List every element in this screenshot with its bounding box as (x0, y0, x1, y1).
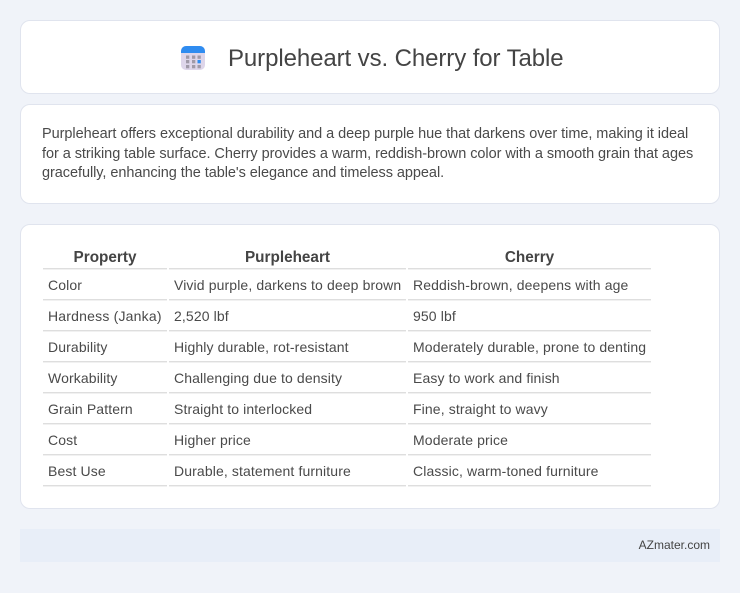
comparison table: Vivid purple, darkens to deep brown (174, 277, 401, 293)
row: Hardness: Hardness (Janka) (48, 308, 162, 324)
comparison table: Challenging due to density (174, 370, 342, 386)
icon: calendar (181, 46, 205, 70)
comparison table: Straight to interlocked (174, 401, 312, 417)
comparison table: 2,520 lbf (174, 308, 229, 324)
comparison table: Easy to work and finish (413, 370, 560, 386)
row: Best Use: Best Use (48, 463, 106, 479)
row: Cost: Cost (48, 432, 77, 448)
text block: summary: gracefully, enhancing the table's elegance and timeless appeal. (42, 165, 444, 181)
comparison table: Higher price (174, 432, 251, 448)
footer bar (20, 529, 720, 562)
row: Grain Pattern: Grain Pattern (48, 401, 133, 417)
table header: Property: Property (74, 249, 136, 266)
comparison table: Highly durable, rot-resistant (174, 339, 349, 355)
heading: title: Purpleheart vs. Cherry for Table (228, 45, 564, 72)
row: Durability: Durability (48, 339, 108, 355)
comparison table: Fine, straight to wavy (413, 401, 548, 417)
comparison table: Moderate price (413, 432, 508, 448)
text block: summary (42, 126, 693, 181)
row: Workability: Workability (48, 370, 118, 386)
footer text: AZmater.com: AZmater.com (639, 538, 710, 552)
comparison table: Classic, warm-toned furniture (413, 463, 599, 479)
comparison table: 950 lbf (413, 308, 456, 324)
table header: Purpleheart: Purpleheart (245, 249, 330, 266)
text block: summary: for a striking table surface. Cherry provides a warm, reddish-brown color with a smooth grain that ages (42, 146, 693, 162)
panel: summary card (20, 104, 720, 204)
comparison table: Durable, statement furniture (174, 463, 351, 479)
comparison table: Reddish-brown, deepens with age (413, 277, 628, 293)
row: Color: Color (48, 277, 82, 293)
text block: summary: Purpleheart offers exceptional durability and a deep purple hue that darkens over time, making it ideal (42, 126, 688, 142)
panel: comparison table card (20, 224, 720, 509)
panel: title card (20, 20, 720, 94)
comparison table: Moderately durable, prone to denting (413, 339, 646, 355)
table header: Cherry: Cherry (505, 249, 554, 266)
